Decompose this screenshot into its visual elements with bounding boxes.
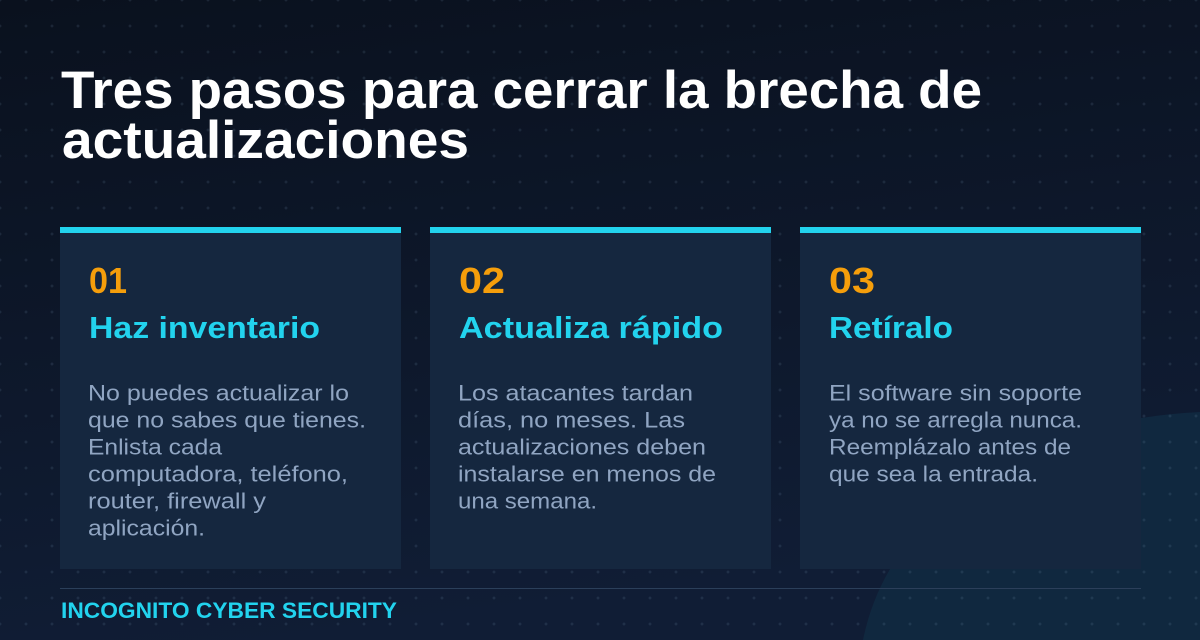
step 2 body text: actualizaciones deben xyxy=(458,435,706,460)
step 2 body text xyxy=(458,381,716,514)
footer brand: INCOGNITO CYBER SECURITY xyxy=(61,598,397,623)
step 1 body text: aplicación. xyxy=(88,516,205,541)
step 2 body text: instalarse en menos de xyxy=(458,462,716,487)
step 3 body text xyxy=(829,381,1082,487)
step 1 number: 01 xyxy=(89,260,127,301)
step 1 body text: No puedes actualizar lo xyxy=(88,381,349,406)
step 3 body text: ya no se arregla nunca. xyxy=(829,408,1082,433)
step 1 body text xyxy=(88,381,366,541)
step 1 body text: router, firewall y xyxy=(88,489,267,514)
step 3 heading: Retíralo xyxy=(829,310,953,345)
title: Tres pasos para cerrar la brecha de xyxy=(61,61,982,120)
step 3 body text: El software sin soporte xyxy=(829,381,1082,406)
panel: step 2 xyxy=(430,227,771,569)
panel: step 3 xyxy=(800,227,1141,569)
title xyxy=(61,61,982,170)
step 2 body text: una semana. xyxy=(458,489,597,514)
step 2 number: 02 xyxy=(459,260,505,301)
step 1 body text: que no sabes que tienes. xyxy=(88,408,366,433)
step 3 body text: que sea la entrada. xyxy=(829,462,1038,487)
step 3 body text: Reemplázalo antes de xyxy=(829,435,1071,460)
step 2 body text: Los atacantes tardan xyxy=(458,381,693,406)
step 3 number: 03 xyxy=(829,260,875,301)
title: actualizaciones xyxy=(62,111,469,170)
step 1 heading: Haz inventario xyxy=(89,310,320,345)
step 1 body text: Enlista cada xyxy=(88,435,223,460)
step 2 heading: Actualiza rápido xyxy=(459,310,723,345)
step 2 body text: días, no meses. Las xyxy=(458,408,685,433)
panel: step 1 xyxy=(60,227,401,569)
decorative corner shape xyxy=(863,412,1200,640)
step 1 body text: computadora, teléfono, xyxy=(88,462,348,487)
